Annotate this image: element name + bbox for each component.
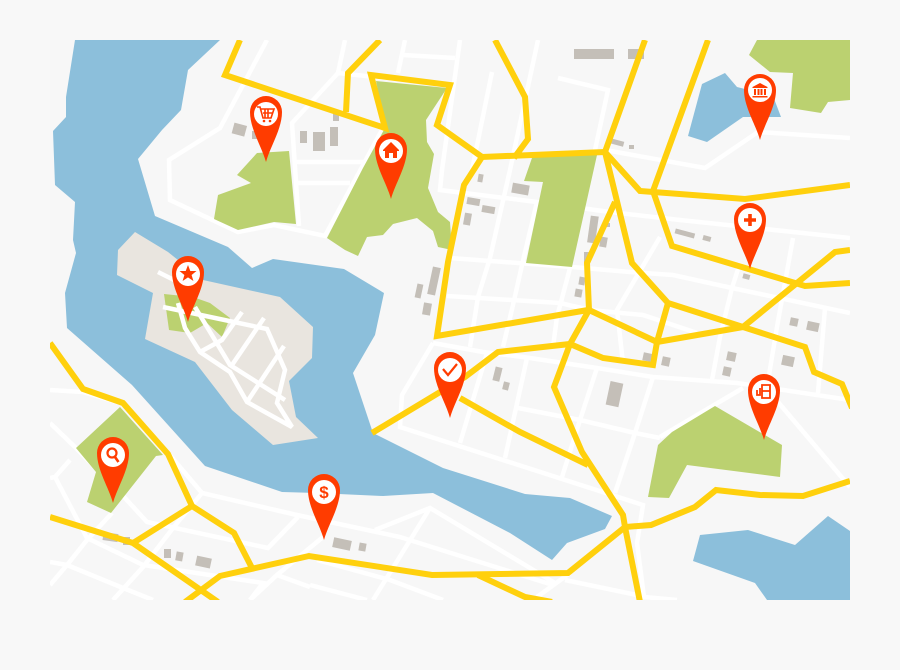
pin: dollar: $: [319, 483, 329, 502]
pin: newspaper: [748, 374, 780, 440]
white streets: [50, 40, 850, 600]
pin: home: [375, 133, 407, 199]
island: [117, 232, 318, 445]
island streets: [158, 272, 292, 427]
pin: medical cross: [734, 203, 766, 269]
buildings: [103, 49, 820, 569]
parks: [76, 40, 850, 513]
pin: check mark: [434, 352, 466, 418]
city map infographic: [50, 40, 850, 600]
pin: shopping cart: [250, 96, 282, 162]
water: river and lakes: [53, 40, 850, 600]
yellow main roads: [50, 40, 852, 602]
pin: star: [172, 256, 204, 322]
pin: bank: [744, 74, 776, 140]
map panel: [50, 40, 852, 602]
pin: dollar: [308, 474, 340, 540]
pin: search: [97, 437, 129, 503]
